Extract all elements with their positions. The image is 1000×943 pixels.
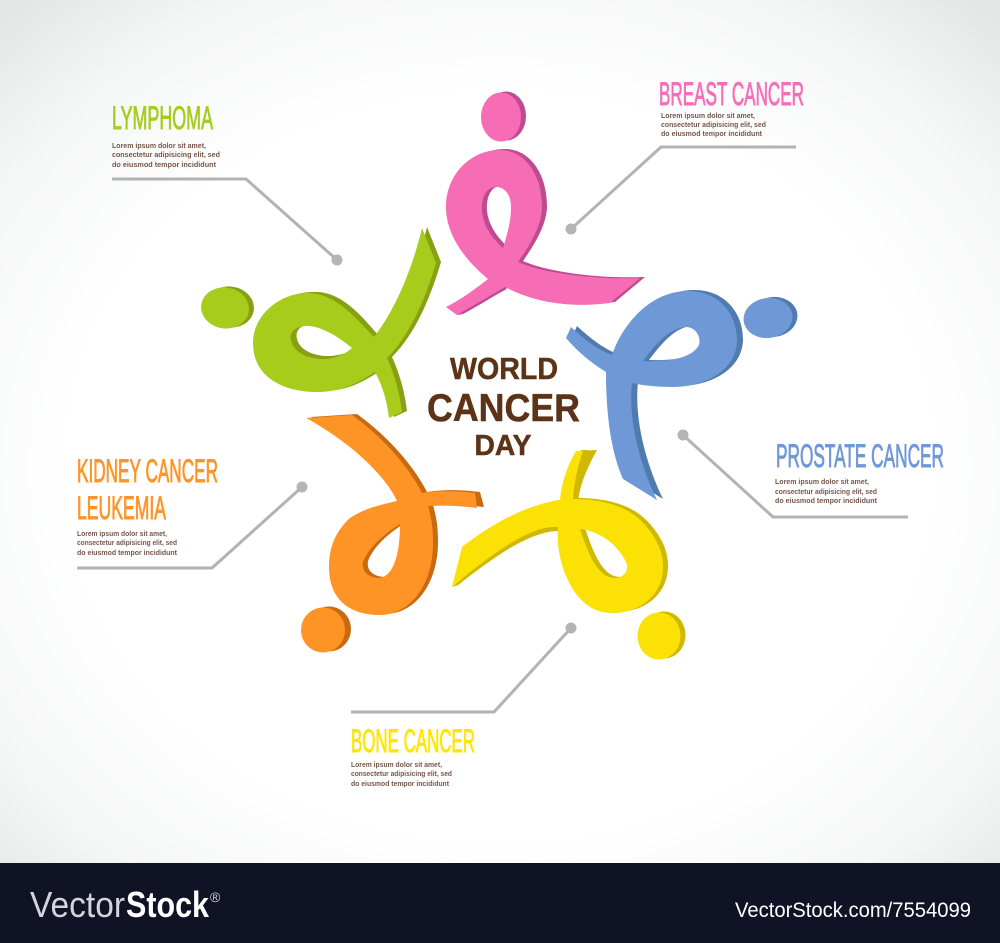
callout: prostate cancer: do eiusmod tempor incididunt (775, 496, 877, 505)
callout: lymphoma: LYMPHOMA (112, 100, 213, 136)
callout: breast cancer (566, 76, 804, 234)
callout: breast cancer: do eiusmod tempor incididunt (661, 129, 762, 138)
callout: prostate cancer (678, 430, 944, 517)
footer band: ® (210, 889, 221, 905)
ribbon figure: breast cancer (pink) (446, 92, 645, 315)
callout: bone cancer: Lorem ipsum dolor sit amet, (351, 760, 442, 769)
centre title (427, 351, 580, 462)
footer band: Vector (30, 884, 125, 925)
callout: lymphoma: do eiusmod tempor incididunt (112, 160, 216, 169)
callout: kidney cancer and leukemia: Lorem ipsum dolor sit amet, (77, 529, 167, 538)
callout: kidney cancer and leukemia: consectetur adipisicing elit, sed (77, 538, 177, 547)
callout: lymphoma (112, 100, 342, 266)
callout: prostate cancer: Lorem ipsum dolor sit amet, (775, 477, 869, 486)
callout: bone cancer: consectetur adipisicing elit, sed (351, 769, 452, 778)
footer band: VectorStock.com/7554099 (735, 899, 971, 922)
centre title: CANCER (427, 387, 580, 430)
callout: kidney cancer and leukemia (77, 453, 308, 568)
callout: kidney cancer and leukemia: KIDNEY CANCER (77, 453, 218, 489)
callout: prostate cancer: consectetur adipisicing elit, sed (775, 487, 877, 496)
callout: lymphoma: Lorem ipsum dolor sit amet, (112, 141, 206, 150)
callout: bone cancer (351, 622, 576, 788)
callout: kidney cancer and leukemia: LEUKEMIA (77, 490, 166, 526)
footer band (0, 863, 1000, 943)
callout: bone cancer: BONE CANCER (351, 723, 475, 759)
footer band: Stock (126, 884, 210, 925)
callout: breast cancer: BREAST CANCER (659, 76, 804, 112)
callout: breast cancer: consectetur adipisicing elit, sed (661, 120, 766, 129)
callout: lymphoma: consectetur adipisicing elit, sed (112, 150, 220, 159)
centre title: WORLD (450, 351, 558, 386)
centre title: DAY (474, 430, 532, 462)
ribbon figure: bone cancer (yellow) (452, 450, 686, 660)
callout: breast cancer: Lorem ipsum dolor sit amet, (661, 111, 755, 120)
ribbon figure: kidney cancer and leukemia (orange) (301, 414, 484, 652)
ribbon figure: prostate cancer (blue) (566, 290, 800, 500)
ribbon figure: lymphoma (green) (198, 227, 441, 418)
callout: kidney cancer and leukemia: do eiusmod tempor incididunt (77, 548, 177, 557)
callout: bone cancer: do eiusmod tempor incididunt (351, 779, 449, 788)
